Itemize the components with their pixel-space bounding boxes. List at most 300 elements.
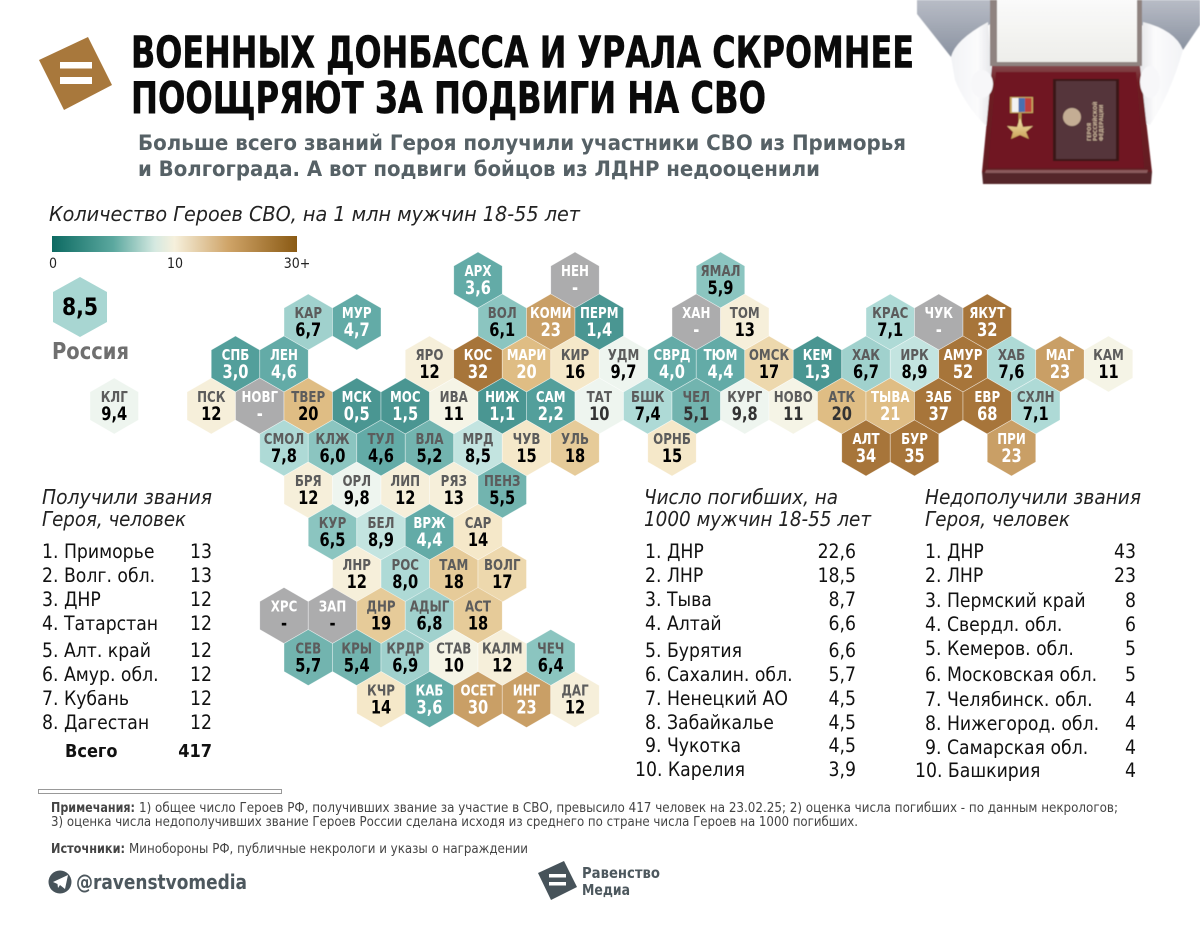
list: regions by deaths: 18,5	[818, 564, 856, 587]
hex: АРХ	[454, 252, 502, 308]
hex: МУР: 4,7	[344, 320, 370, 341]
hex: КРДР: КРДР	[386, 641, 424, 658]
hex: ВОЛГ: ВОЛГ	[484, 557, 521, 574]
hex: КЛГ: КЛГ	[101, 389, 128, 406]
list: regions by deaths: 4,5	[829, 711, 856, 734]
hex: КОМИ: КОМИ	[530, 305, 572, 322]
hex: ЯКУТ	[963, 294, 1012, 350]
hex: ХАК: ХАК	[852, 347, 881, 364]
hex: НЕН: НЕН	[561, 263, 589, 280]
list: top regions by titles: 7. Кубань	[42, 687, 129, 710]
list: regions by missing titles: 4	[1125, 759, 1136, 782]
hex: НИЖ: 1,1	[489, 404, 515, 425]
list: regions by deaths: 3,9	[829, 758, 856, 781]
hex: ИВА: 11	[444, 404, 464, 425]
hex: ЛНР: 12	[347, 572, 367, 593]
photo: Hero of Russia medal in a box held by white gloves: РОССИЙСКОЙ	[1091, 102, 1099, 141]
hex: ТВЕР: 20	[298, 404, 319, 425]
hex: ЯРО	[405, 336, 454, 392]
list: regions by deaths: 6. Сахалин. обл.	[645, 663, 793, 686]
hex: МРД: 8,5	[465, 446, 491, 467]
hex: ИВА: ИВА	[440, 389, 468, 406]
logo: Равенство Медиа: Равенство	[582, 864, 660, 882]
hex: ИВА	[430, 378, 478, 434]
hex: БШК: БШК	[631, 389, 665, 406]
list: regions by missing titles: 2. ЛНР	[925, 564, 983, 587]
hex: БРЯ: БРЯ	[295, 473, 322, 490]
hex: ТУЛ: ТУЛ	[367, 431, 395, 448]
list: regions by missing titles: 7. Челябинск. обл.	[925, 688, 1093, 711]
hex: ИРК: ИРК	[900, 347, 929, 364]
hex: КАР: КАР	[294, 305, 322, 322]
hex: КАР	[284, 294, 332, 350]
hex: ХАН: -	[693, 320, 699, 341]
hex: КАР: 6,7	[295, 320, 321, 341]
hex: МОС: 1,5	[392, 404, 418, 425]
list: regions by deaths	[635, 540, 856, 781]
list: regions by deaths: 22,6	[818, 540, 856, 563]
hex: ПСК: ПСК	[197, 389, 226, 406]
hex: ВОЛ: 6,1	[489, 320, 515, 341]
title	[131, 28, 914, 124]
hex: КРДР	[381, 630, 430, 686]
heading: received titles: Героя, человек	[42, 507, 187, 531]
Russia average hexagon	[52, 277, 129, 365]
list: regions by missing titles: 9. Самарская обл.	[925, 736, 1088, 759]
hex: ДАГ: 12	[565, 698, 585, 719]
sources: Источники:	[51, 841, 125, 857]
hex: ХАК: 6,7	[853, 362, 879, 383]
hex: КЛГ: 9,4	[101, 404, 127, 425]
hex: ЧЕЛ: ЧЕЛ	[682, 389, 710, 406]
hex: ТАТ: 10	[589, 404, 610, 425]
hex: СПБ: 3,0	[223, 362, 249, 383]
photo: Hero of Russia medal in a box held by white gloves	[917, 0, 1200, 184]
telegram handle: @ravenstvomedia	[76, 870, 247, 894]
hex: ОМСК: 17	[759, 362, 779, 383]
hex: КРАС	[866, 294, 914, 350]
list: regions by deaths: 4,5	[829, 734, 856, 757]
hex: ТАТ: ТАТ	[587, 389, 612, 406]
hex: АДЫГ	[405, 588, 454, 644]
list: top regions by titles: 4. Татарстан	[42, 612, 158, 635]
list: regions by missing titles: 8. Нижегород. обл.	[925, 712, 1099, 735]
hex: ТАМ: 18	[444, 572, 464, 593]
hex: РЯЗ: РЯЗ	[441, 473, 467, 490]
list: regions by deaths: 8. Забайкалье	[645, 711, 774, 734]
hex: БШК: 7,4	[635, 404, 661, 425]
list: top regions by titles: 2. Волг. обл.	[42, 564, 155, 587]
hex: РОС: 8,0	[392, 572, 418, 593]
hex: КОМИ: 23	[541, 320, 561, 341]
hex: САР: 14	[468, 530, 488, 551]
hex: ВРЖ: ВРЖ	[413, 515, 446, 532]
hex: ХАБ: 7,6	[999, 362, 1025, 383]
hex: ВОЛГ	[478, 546, 526, 602]
hex: ТАМ	[430, 546, 478, 602]
hex: КАЛМ	[478, 630, 526, 686]
hex: КЛГ	[90, 378, 138, 434]
hex: МСК: 0,5	[344, 404, 370, 425]
hex: КАЛМ: 12	[492, 656, 512, 677]
hex: КОС: КОС	[464, 347, 492, 364]
hex: РОС: РОС	[392, 557, 419, 574]
hex: ИРК: 8,9	[902, 362, 927, 383]
hex: ЗАБ: 37	[929, 404, 949, 425]
heading: received titles	[42, 485, 212, 531]
hex: МРД	[454, 420, 502, 476]
photo: Hero of Russia medal in a box held by white gloves: ГЕРОЯ	[1087, 123, 1093, 141]
hex: РОС	[381, 546, 430, 602]
hex: ЗАБ: ЗАБ	[925, 389, 952, 406]
hex: АМУР: 52	[953, 362, 973, 383]
hex: АРХ: 3,6	[465, 278, 491, 299]
list: top regions by titles: 13	[190, 564, 212, 587]
list: regions by deaths: 8,7	[829, 588, 856, 611]
hex: ХРС: -	[281, 614, 287, 635]
hex: НЕН: -	[572, 278, 578, 299]
hex: БУР: 35	[904, 446, 925, 467]
hex: МАГ: МАГ	[1046, 347, 1074, 364]
hex: КУРГ	[720, 378, 769, 434]
hex: ЧЕЛ: 5,1	[683, 404, 709, 425]
hex: КЕМ	[793, 336, 842, 392]
hex: БУР: БУР	[901, 431, 928, 448]
hex: СХЛН: 7,1	[1023, 404, 1049, 425]
hex: КЧР: 14	[371, 698, 391, 719]
hex: АЛТ	[842, 420, 890, 476]
hex: БШК	[624, 378, 672, 434]
list: regions by deaths: 5,7	[829, 663, 856, 686]
hex: ОРНБ: 15	[662, 446, 682, 467]
hex: ЯМАЛ: ЯМАЛ	[701, 263, 740, 280]
hex: ОРНБ	[648, 420, 696, 476]
hex: КУРГ: КУРГ	[727, 389, 762, 406]
subtitle: Больше всего званий Героя получили участники СВО из Приморья	[138, 131, 906, 155]
hex: ОМСК	[745, 336, 793, 392]
hex: ОРЛ: 9,8	[344, 488, 370, 509]
list: top regions by titles: 417	[178, 741, 212, 762]
hex: ЧУВ: 15	[516, 446, 537, 467]
list: top regions by titles: 12	[190, 612, 212, 635]
hex: МСК: МСК	[342, 389, 372, 406]
hex: ТЫВА: ТЫВА	[871, 389, 910, 406]
hexagon map of regions	[90, 252, 1133, 728]
list: top regions by titles: 1. Приморье	[42, 540, 154, 563]
hex: СТАВ	[430, 630, 478, 686]
sources: Минобороны РФ, публичные некрологи и указы о награждении	[129, 841, 528, 857]
hex: МРД: МРД	[462, 431, 494, 448]
Russia average hexagon: Россия	[52, 339, 129, 365]
list: regions by missing titles: 3. Пермский край	[925, 589, 1086, 612]
list: top regions by titles	[42, 540, 212, 762]
heading: deaths	[644, 485, 872, 531]
hex: ИНГ	[502, 672, 551, 728]
Russia average hexagon: 8,5	[62, 293, 98, 321]
hex: ЧУК: ЧУК	[925, 305, 954, 322]
hex: СВРД: 4,0	[659, 362, 685, 383]
hex: ДНР	[357, 588, 405, 644]
list: regions by missing titles: 1. ДНР	[925, 540, 984, 563]
hex: ХРС	[260, 588, 308, 644]
list: regions by missing titles: 4. Свердл. обл.	[925, 613, 1062, 636]
hex: ДАГ	[551, 672, 599, 728]
hex: СМОЛ: СМОЛ	[264, 431, 304, 448]
hex: КЛЖ: КЛЖ	[315, 431, 350, 448]
logo: Равенство Медиа: Медиа	[582, 881, 630, 899]
hex: НОВО: НОВО	[774, 389, 813, 406]
hex: УЛЬ	[551, 420, 599, 476]
list: top regions by titles: 12	[190, 639, 212, 662]
list: regions by deaths: 7. Ненецкий АО	[645, 687, 788, 710]
notes	[51, 800, 1118, 830]
hex: КУР: КУР	[319, 515, 346, 532]
hex: КИР: 16	[565, 362, 585, 383]
hex: ЛЕН: 4,6	[271, 362, 297, 383]
list: regions by missing titles: 6	[1125, 613, 1136, 636]
hex: ПСК: 12	[201, 404, 221, 425]
list: top regions by titles: 12	[190, 687, 212, 710]
legend: colour scale	[49, 236, 310, 272]
hex: СМОЛ: 7,8	[271, 446, 297, 467]
hex: ВОЛГ: 17	[492, 572, 512, 593]
hex: ЛИП: 12	[395, 488, 415, 509]
hex: ЧУК: -	[936, 320, 942, 341]
hex: САМ: САМ	[536, 389, 566, 406]
list: regions by deaths: 10. Карелия	[635, 758, 745, 781]
legend: colour scale: 30+	[284, 256, 310, 272]
hex: ПЕРМ: 1,4	[586, 320, 612, 341]
subtitle	[138, 131, 906, 181]
list: regions by missing titles: 4	[1125, 736, 1136, 759]
hex: БЕЛ	[357, 504, 405, 560]
hex: КРЫ	[332, 630, 381, 686]
hex: ВЛА: ВЛА	[415, 431, 444, 448]
legend: colour scale: 0	[49, 256, 57, 272]
hex: МОС	[381, 378, 430, 434]
hex: ЗАП: ЗАП	[319, 599, 346, 616]
hex: УДМ	[599, 336, 648, 392]
hex: АРХ: АРХ	[464, 263, 492, 280]
hex: АДЫГ: 6,8	[417, 614, 442, 635]
hex: ВЛА: 5,2	[417, 446, 442, 467]
hex: УДМ: УДМ	[608, 347, 639, 364]
list: regions by missing titles: 6. Московская обл.	[925, 663, 1097, 686]
hex: КЛЖ: 6,0	[320, 446, 346, 467]
list: regions by deaths: 6,6	[829, 612, 856, 635]
hex: ЯМАЛ	[696, 252, 745, 308]
panel: under-awarded heroes	[915, 485, 1141, 782]
title: ПООЩРЯЮТ ЗА ПОДВИГИ НА СВО	[131, 73, 766, 124]
hex: САР: САР	[465, 515, 491, 532]
heading: under-awarded: Недополучили звания	[925, 485, 1141, 509]
hex: КЕМ: 1,3	[805, 362, 830, 383]
photo: Hero of Russia medal in a box held by white gloves: ФЕДЕРАЦИИ	[1099, 105, 1105, 141]
list: regions by deaths: 1. ДНР	[645, 540, 704, 563]
hex: ХАН	[672, 294, 720, 350]
hex: НОВГ	[236, 378, 284, 434]
list: regions by deaths: 5. Бурятия	[645, 639, 742, 662]
hex: ОРНБ: ОРНБ	[653, 431, 691, 448]
hex: НОВО: 11	[783, 404, 803, 425]
hex: ТЮМ: ТЮМ	[704, 347, 737, 364]
hex: КЧР: КЧР	[367, 683, 395, 700]
hex: СВРД	[648, 336, 696, 392]
hex: КАМ: 11	[1098, 362, 1119, 383]
hex: МУР	[332, 294, 381, 350]
list: regions by deaths: 3. Тыва	[645, 588, 712, 611]
list: regions by missing titles: 43	[1114, 540, 1136, 563]
hex: ПРИ: 23	[1001, 446, 1022, 467]
hex: АСТ: 18	[468, 614, 488, 635]
hex: ХРС: ХРС	[271, 599, 297, 616]
hex: ОРЛ	[332, 462, 381, 518]
hex: ТОМ: ТОМ	[730, 305, 760, 322]
list: regions by missing titles	[915, 540, 1136, 782]
list: regions by deaths: 2. ЛНР	[645, 564, 703, 587]
hex: ДНР: 19	[371, 614, 391, 635]
hex: ТВЕР: ТВЕР	[291, 389, 325, 406]
hex: ИРК	[890, 336, 939, 392]
hex: КУР	[308, 504, 357, 560]
hex: СПБ: СПБ	[222, 347, 249, 364]
chart heading: Количество Героев СВО, на 1 млн мужчин 18-55 лет	[49, 202, 581, 226]
hex: ДНР: ДНР	[366, 599, 396, 616]
list: regions by missing titles: 4	[1125, 688, 1136, 711]
hex: НОВГ: -	[257, 404, 263, 425]
hex: МАРИ: МАРИ	[507, 347, 546, 364]
hex: АСТ: АСТ	[465, 599, 491, 616]
hex: УЛЬ: 18	[565, 446, 585, 467]
hex: СТАВ: 10	[444, 656, 464, 677]
subtitle: и Волгограда. А вот подвиги бойцов из ЛДНР недооценили	[138, 157, 820, 181]
hex: САМ: 2,2	[538, 404, 564, 425]
hex: ТОМ: 13	[735, 320, 755, 341]
hex: КРЫ: 5,4	[344, 656, 370, 677]
hex: ОСЕТ	[454, 672, 502, 728]
hex: ПЕРМ	[575, 294, 624, 350]
list: regions by missing titles: 4	[1125, 712, 1136, 735]
heading: deaths: Число погибших, на	[644, 485, 838, 509]
hex: ХАБ	[987, 336, 1036, 392]
hex: СЕВ	[284, 630, 332, 686]
hex: БЕЛ: 8,9	[368, 530, 394, 551]
hex: ТОМ	[720, 294, 769, 350]
hex: МСК	[332, 378, 381, 434]
hex: ЕВР: 68	[977, 404, 997, 425]
hex: ХАН: ХАН	[682, 305, 710, 322]
hex: ЧЕЧ	[526, 630, 575, 686]
hex: ХАБ: ХАБ	[998, 347, 1025, 364]
hex: ЧЕЧ: ЧЕЧ	[537, 641, 564, 658]
list: regions by deaths: 4. Алтай	[645, 612, 722, 635]
hex: КАБ	[405, 672, 454, 728]
hex: АЛТ: АЛТ	[852, 431, 880, 448]
heading: deaths: 1000 мужчин 18-55 лет	[644, 507, 872, 531]
hex: НОВГ: НОВГ	[241, 389, 278, 406]
hex: ЧЕЛ	[672, 378, 720, 434]
heading: under-awarded: Героя, человек	[925, 507, 1071, 531]
hex: СМОЛ	[260, 420, 308, 476]
hex: КАБ: 3,6	[417, 698, 443, 719]
hex: АТК: 20	[832, 404, 852, 425]
hex: КИР	[551, 336, 599, 392]
list: top regions by titles: 6. Амур. обл.	[42, 663, 159, 686]
hex: КЛЖ	[308, 420, 357, 476]
legend: colour scale: 10	[167, 256, 183, 272]
hex: ЯМАЛ: 5,9	[708, 278, 733, 299]
list: regions by deaths: 9. Чукотка	[645, 734, 741, 757]
hex: ТЮМ: 4,4	[708, 362, 734, 383]
hex: КАМ: КАМ	[1093, 347, 1124, 364]
hex: ПЕНЗ: 5,5	[489, 488, 515, 509]
heading: received titles: Получили звания	[42, 485, 212, 509]
hex: ДАГ: ДАГ	[561, 683, 589, 700]
hex: АДЫГ: АДЫГ	[410, 599, 449, 616]
hex: ХАК	[842, 336, 890, 392]
list: top regions by titles: 12	[190, 588, 212, 611]
hex: ЛНР	[332, 546, 381, 602]
hex: СХЛН	[1012, 378, 1060, 434]
hex: РЯЗ	[430, 462, 478, 518]
list: regions by deaths: 4,5	[829, 687, 856, 710]
list: regions by missing titles: 8	[1125, 589, 1136, 612]
hex: КРАС: 7,1	[877, 320, 903, 341]
hex: ЧУК	[914, 294, 963, 350]
hex: КОС	[454, 336, 502, 392]
hex: КАЛМ: КАЛМ	[482, 641, 523, 658]
hex: НЕН	[551, 252, 599, 308]
hex: ТАТ	[575, 378, 624, 434]
hex: КРДР: 6,9	[392, 656, 418, 677]
hex: ИНГ: ИНГ	[513, 683, 540, 700]
list: top regions by titles: 5. Алт. край	[42, 639, 151, 662]
hex: ОРЛ: ОРЛ	[342, 473, 371, 490]
list: regions by missing titles: 5	[1125, 663, 1136, 686]
hex: ЗАП	[308, 588, 357, 644]
notes: 1) общее число Героев РФ, получивших звание за участие в СВО, превысило 417 человек на 23.02.25; 2) оценка числа погибших - по данным некрологов;	[139, 800, 1118, 816]
hex: СВРД: СВРД	[654, 347, 690, 364]
hex: КОМИ	[526, 294, 575, 350]
hex: ВОЛ	[478, 294, 526, 350]
list: regions by missing titles: 5	[1125, 637, 1136, 660]
hex: ЧУВ: ЧУВ	[513, 431, 540, 448]
hex: СЕВ: 5,7	[295, 656, 321, 677]
notes: Примечания:	[51, 800, 135, 816]
hex: ЯКУТ: ЯКУТ	[969, 305, 1006, 322]
hex: АЛТ: 34	[856, 446, 876, 467]
hex: ЛИП	[381, 462, 430, 518]
list: regions by deaths: 6,6	[829, 639, 856, 662]
logo: brown rotated square with equals sign	[39, 37, 112, 110]
title: ВОЕННЫХ ДОНБАССА И УРАЛА СКРОМНЕЕ	[131, 28, 914, 78]
hex: ЛИП: ЛИП	[390, 473, 420, 490]
hex: ТЫВА: 21	[880, 404, 900, 425]
hex: АСТ	[454, 588, 502, 644]
hex: ОМСК: ОМСК	[749, 347, 790, 364]
hex: ВОЛ: ВОЛ	[488, 305, 517, 322]
hex: ЧУВ	[502, 420, 551, 476]
hex: УДМ: 9,7	[611, 362, 636, 383]
hex: БУР	[890, 420, 939, 476]
list: regions by missing titles: 23	[1114, 564, 1136, 587]
hex: ВРЖ	[405, 504, 454, 560]
hex: ТУЛ	[357, 420, 405, 476]
hex: КУРГ: 9,8	[732, 404, 758, 425]
hex: ТЫВА	[866, 378, 914, 434]
hex: ЛНР: ЛНР	[343, 557, 371, 574]
panel: deaths per 1000 men	[635, 485, 872, 781]
